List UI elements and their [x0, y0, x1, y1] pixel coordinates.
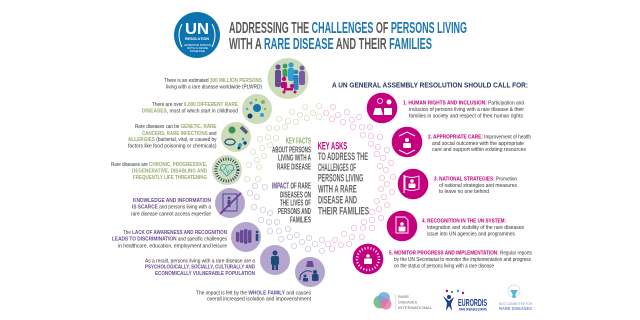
logo: UN resolution badge: UN: [185, 21, 209, 38]
impact 4 text: [196, 290, 311, 303]
impact 2 text: LEADS TO DISCRIMINATION and specific challenges: [112, 237, 227, 243]
centre heading: key facts: [272, 136, 311, 171]
fact 3 text: [128, 124, 217, 150]
impact 3 text: [145, 258, 255, 277]
ask 2 text: [428, 134, 531, 153]
impact 4 text: overall increased isolation and impoverishment: [207, 297, 311, 303]
title: [229, 20, 467, 53]
impact 3 text: PSYCHOLOGICALLY, SOCIALLY, CULTURALLY AND: [145, 264, 255, 270]
fact 4 text: [111, 162, 207, 181]
impact 1 text: rare disease cannot access expertise: [131, 211, 211, 217]
logo: Rare Diseases International: INTERNATIONAL: [398, 305, 433, 310]
logo: UN resolution badge: DISEASE: [190, 49, 205, 53]
impact 2 text: The LACK OF AWARENESS AND RECOGNITION: [123, 230, 227, 236]
fact 1 text: [164, 78, 262, 90]
ask 1 text: families in society and respect of their human rights: [409, 114, 523, 120]
impact 2: crowd icon: [231, 222, 261, 252]
fact 2: cells icon: [242, 94, 272, 124]
fact 4 text: DEGENERATIVE, DISABLING AND: [132, 168, 207, 174]
ask 4 text: [422, 218, 524, 238]
ask 2 text: care and support within existing resources: [432, 147, 526, 153]
centre heading: key asks: PERSONS LIVING: [318, 173, 363, 185]
ask 1 text: [403, 100, 524, 120]
ask 2: care hands icon: [392, 127, 422, 157]
ask 1: human rights icon: [367, 93, 397, 123]
fact 3 text: ALLERGIES (bacterial, viral, or caused by: [128, 137, 217, 143]
ask 5 text: 5. MONITOR PROGRESS AND IMPLEMENTATION: Regular reports: [389, 250, 532, 256]
logo: Rare Diseases International: RARE: [398, 294, 409, 299]
ask 4 text: Integration and visibility of the rare diseases: [427, 225, 524, 231]
centre heading: key facts: LIVING WITH A: [278, 153, 311, 163]
centre heading: key asks: KEY ASKS: [318, 141, 347, 153]
logo: Eurordis: EURORDIS: [458, 298, 487, 309]
centre heading: impact: IMPACT OF RARE: [272, 181, 311, 191]
fact 3: bacteria icon: [221, 122, 251, 152]
fact 3 text: Rare diseases can be GENETIC, RARE: [135, 124, 217, 130]
heading: resolution call: A UN GENERAL ASSEMBLY RESOLUTION SHOULD CALL FOR:: [332, 82, 528, 90]
impact 1 text: IS SCARCE and persons living with a: [132, 205, 211, 211]
fact 3 text: CANCERS, RARE INFECTIONS and: [142, 131, 216, 137]
logo: NGO Committee for Rare Diseases: [499, 285, 532, 311]
fact 2 text: [142, 102, 238, 114]
centre heading: key asks: [318, 141, 369, 218]
centre heading: impact: [272, 181, 311, 225]
fact 4 text: FREQUENTLY LIFE THREATENING: [133, 175, 207, 181]
logo: UN resolution badge: ADDRESSING PERSONS: [184, 43, 211, 47]
impact 3 text: As a result, persons living with a rare disease are a: [145, 258, 255, 264]
ask 2 text: and social outcomes with the appropriate: [432, 141, 524, 147]
logo: UN resolution badge: [174, 12, 220, 58]
fact 1: people group icon: [268, 58, 308, 99]
ask 3: national flag icon: [398, 169, 428, 199]
logo: UN resolution badge: RESOLUTION: [185, 37, 209, 41]
title: WITH A RARE DISEASE AND THEIR FAMILIES: [229, 36, 432, 53]
fact 4: heart pulse icon: [212, 155, 242, 185]
impact 3 text: ECONOMICALLY VULNERABLE POPULATION: [155, 271, 255, 277]
impact 1 text: KNOWLEDGE AND INFORMATION: [133, 198, 211, 204]
centre heading: impact: DISEASES ON: [280, 189, 311, 199]
fact 3 text: factors like food poisoning or chemicals): [128, 144, 217, 150]
centre heading: key facts: ABOUT PERSONS: [272, 144, 311, 154]
logo: NGO Committee for Rare Diseases: NGO COMMITTEE FOR: [499, 302, 532, 306]
ask 3 text: 3. NATIONAL STRATEGIES: Promotion: [434, 176, 517, 182]
centre heading: key facts: KEY FACTS: [286, 136, 311, 146]
impact 4: family burden icon: [295, 257, 325, 287]
centre heading: key asks: WITH A RARE: [318, 184, 357, 196]
ask 5: monitoring gauge icon: [353, 244, 383, 274]
logo: Rare Diseases International: DISEASES: [398, 300, 417, 304]
impact 1: crossed book icon: [215, 188, 245, 218]
ask 5 text: by the UN Secretariat to monitor the implementation and progress: [394, 257, 531, 263]
centre heading: impact: PERSONS AND: [278, 206, 311, 216]
impact 1 text: [131, 198, 211, 217]
ask 4 text: 4. RECOGNITION IN THE UN SYSTEM:: [422, 218, 506, 224]
title: ADDRESSING THE CHALLENGES OF PERSONS LIVING: [229, 20, 467, 37]
ask 4: UN document icon: [387, 211, 417, 241]
logo: Eurordis: RARE DISEASES EUROPE: [459, 308, 487, 312]
dotted ring: purple section: [247, 183, 325, 254]
ask 3 text: to leave no one behind: [439, 189, 489, 195]
logo: Eurordis: [443, 290, 487, 312]
fact 1 text: living with a rare disease worldwide (PLWRD): [166, 84, 262, 90]
logo: UN resolution badge: WITH A RARE: [187, 46, 208, 50]
impact 3: lone person icon: [260, 245, 290, 275]
fact 2 text: There are over 6,000 DIFFERENT RARE: [152, 102, 238, 108]
ask 5 text: [389, 250, 532, 270]
ask 3 text: of national strategies and measures: [439, 183, 517, 189]
ask 4 text: issue into UN agencies and programmes: [427, 232, 515, 238]
impact 2 text: [112, 230, 227, 249]
ask 1 text: inclusion of persons living with a rare disease & their: [409, 107, 524, 113]
dotted ring: pink section: [323, 104, 396, 252]
fact 1 text: There is an estimated 300 MILLION PERSONS: [164, 78, 262, 84]
centre heading: key asks: THEIR FAMILIES: [318, 206, 369, 218]
centre heading: impact: THE LIVES OF: [280, 197, 311, 207]
fact 2 text: DISEASES, most of which start in childhood: [142, 108, 238, 114]
centre heading: key asks: DISEASE AND: [318, 195, 357, 207]
logo: Rare Diseases International: [374, 292, 433, 310]
centre heading: impact: FAMILIES: [290, 215, 311, 225]
logo: NGO Committee for Rare Diseases: RARE DISEASES: [499, 306, 532, 311]
dotted ring: green section: [244, 103, 322, 182]
ask 1 text: 1. HUMAN RIGHTS AND INCLUSION: Participation and: [403, 100, 524, 106]
centre heading: key asks: TO ADDRESS THE: [318, 151, 368, 163]
ask 3 text: [434, 176, 517, 195]
ask 2 text: 2. APPROPRIATE CARE: Improvement of health: [428, 134, 531, 140]
impact 2 text: in healthcare, education, employment and leisure: [118, 243, 227, 249]
centre heading: key asks: CHALLENGES OF: [318, 162, 356, 174]
fact 4 text: Rare diseases are CHRONIC, PROGRESSIVE,: [111, 162, 207, 168]
centre heading: key facts: RARE DISEASE: [277, 161, 311, 171]
impact 4 text: The impact is felt by the WHOLE FAMILY and causes: [196, 290, 311, 296]
ask 5 text: on the status of persons living with a rare disease: [394, 264, 494, 270]
